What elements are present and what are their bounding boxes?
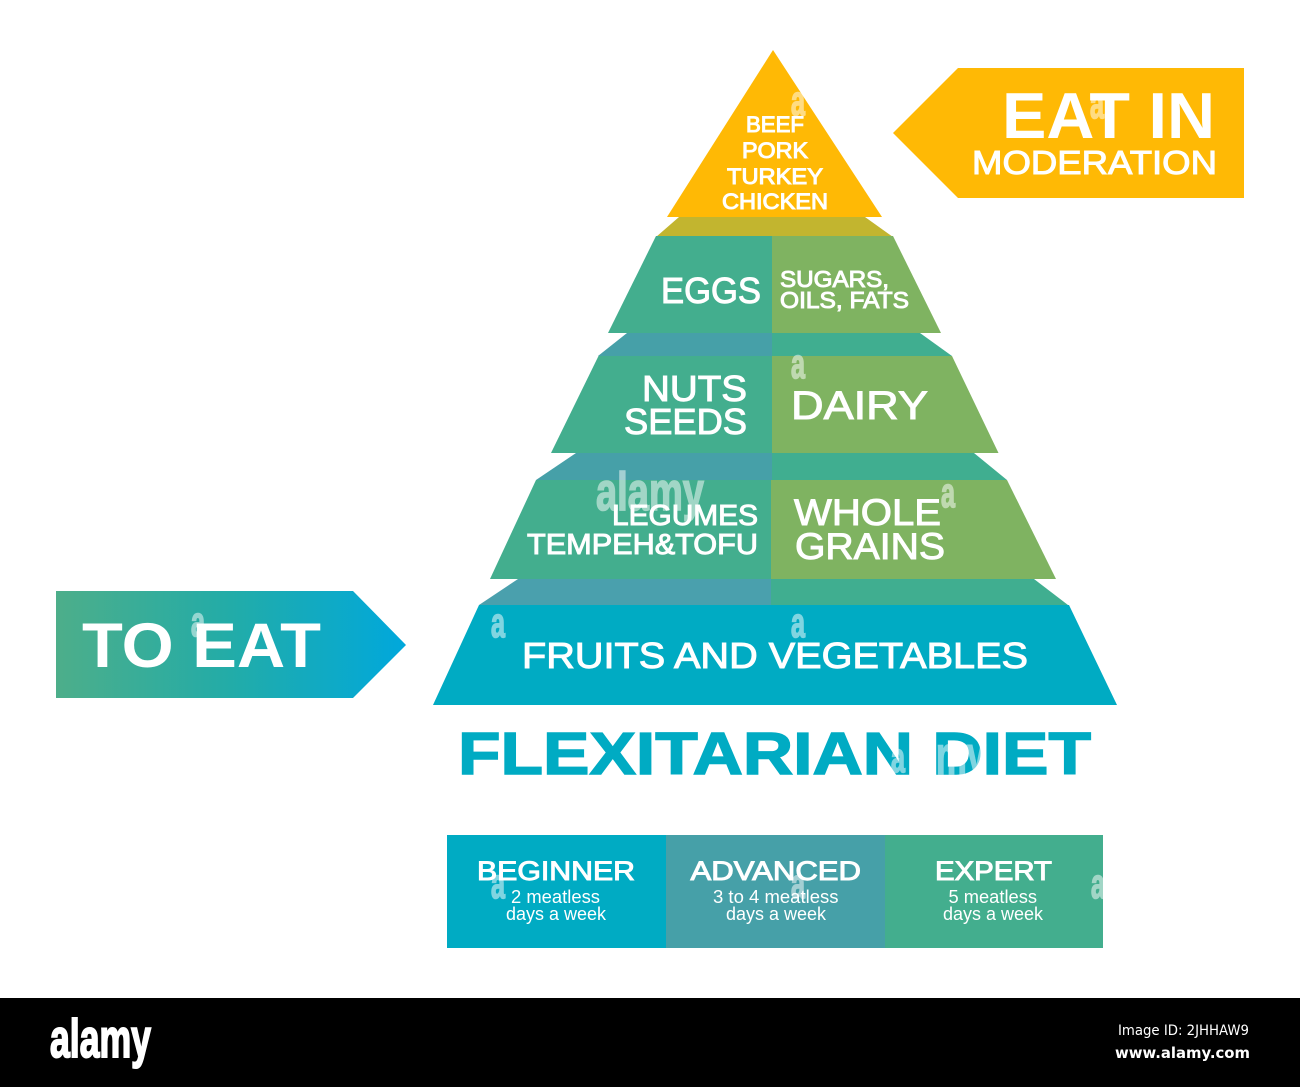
levels table [447, 835, 1103, 948]
stock watermarks: alamy [596, 462, 704, 522]
pyramid tier: nuts, seeds and dairy: DAIRY [791, 384, 928, 428]
pyramid tier: eggs, sugars and oils: EGGS [661, 270, 761, 311]
stock watermarks: my [936, 726, 986, 786]
pyramid tier: meats [667, 50, 882, 217]
footer logo: alamy [50, 1009, 151, 1069]
pyramid tier: nuts, seeds and dairy: SEEDS [624, 401, 747, 442]
callout arrow: to eat: TO EAT [82, 611, 321, 681]
level: expert: 5 meatless [948, 887, 1037, 907]
pyramid tier: meats: BEEF [746, 112, 804, 137]
pyramid connector: fourth band [479, 579, 1068, 605]
level: advanced: ADVANCED [690, 856, 861, 886]
stock watermarks [191, 77, 1105, 907]
pyramid tier: nuts, seeds and dairy [551, 356, 998, 453]
level: advanced: 3 to 4 meatless [713, 887, 838, 907]
pyramid tier: legumes and whole grains: TEMPEH&TOFU [527, 529, 758, 561]
pyramid tier: eggs, sugars and oils: OILS, FATS [780, 287, 909, 313]
stock watermarks: a [1090, 80, 1104, 127]
stock watermarks: a [191, 598, 205, 645]
level: expert: EXPERT [935, 856, 1052, 886]
level: advanced [666, 835, 885, 948]
callout arrow: eat in moderation: EAT IN [1002, 79, 1215, 152]
footer url: www.alamy.com [1115, 1044, 1250, 1062]
level: beginner: 2 meatless [511, 887, 600, 907]
pyramid connector: second band [598, 333, 952, 356]
level: advanced: days a week [726, 904, 827, 924]
stock watermarks: a [791, 77, 805, 124]
stock watermarks: a [1091, 860, 1105, 907]
level: beginner [447, 835, 666, 948]
level: beginner: BEGINNER [477, 856, 635, 886]
pyramid tier: eggs, sugars and oils: SUGARS, [780, 266, 889, 292]
pyramid tier: meats: PORK [742, 138, 808, 163]
pyramid tier: connector under meats [656, 217, 893, 237]
callout arrow: eat in moderation: MODERATION [972, 144, 1217, 181]
stock watermarks: a [791, 860, 805, 907]
stock watermarks: a [791, 599, 805, 646]
stock watermarks: a [941, 469, 955, 516]
pyramid tier: fruits and vegetables [433, 605, 1117, 705]
callout arrow: eat in moderation [893, 68, 1244, 198]
pyramid tier: legumes and whole grains [490, 480, 1056, 579]
footer bar [0, 998, 1300, 1087]
stock watermarks: a [891, 734, 905, 781]
level: expert: days a week [943, 904, 1044, 924]
callout arrow: to eat [56, 591, 406, 698]
pyramid tier: legumes and whole grains: GRAINS [795, 526, 945, 567]
pyramid tier: legumes and whole grains: WHOLE [794, 492, 941, 533]
pyramid tier: meats: CHICKEN [722, 189, 828, 214]
pyramid [433, 50, 1117, 705]
level: expert [885, 835, 1103, 948]
footer image id: Image ID: 2JHHAW9 [1118, 1023, 1249, 1039]
pyramid tier: eggs, sugars and oils [608, 236, 941, 333]
pyramid tier: meats: TURKEY [727, 164, 823, 189]
stock watermarks: a [791, 340, 805, 387]
title: FLEXITARIAN DIET [458, 721, 1091, 787]
stock watermarks: a [491, 860, 505, 907]
pyramid tier: fruits and vegetables: FRUITS AND VEGETABLES [522, 635, 1028, 676]
stock watermarks: a [491, 599, 505, 646]
pyramid connector: third band [536, 453, 1007, 480]
pyramid tier: legumes and whole grains: LEGUMES [612, 500, 758, 532]
pyramid tier: nuts, seeds and dairy: NUTS [642, 368, 747, 409]
level: beginner: days a week [506, 904, 607, 924]
